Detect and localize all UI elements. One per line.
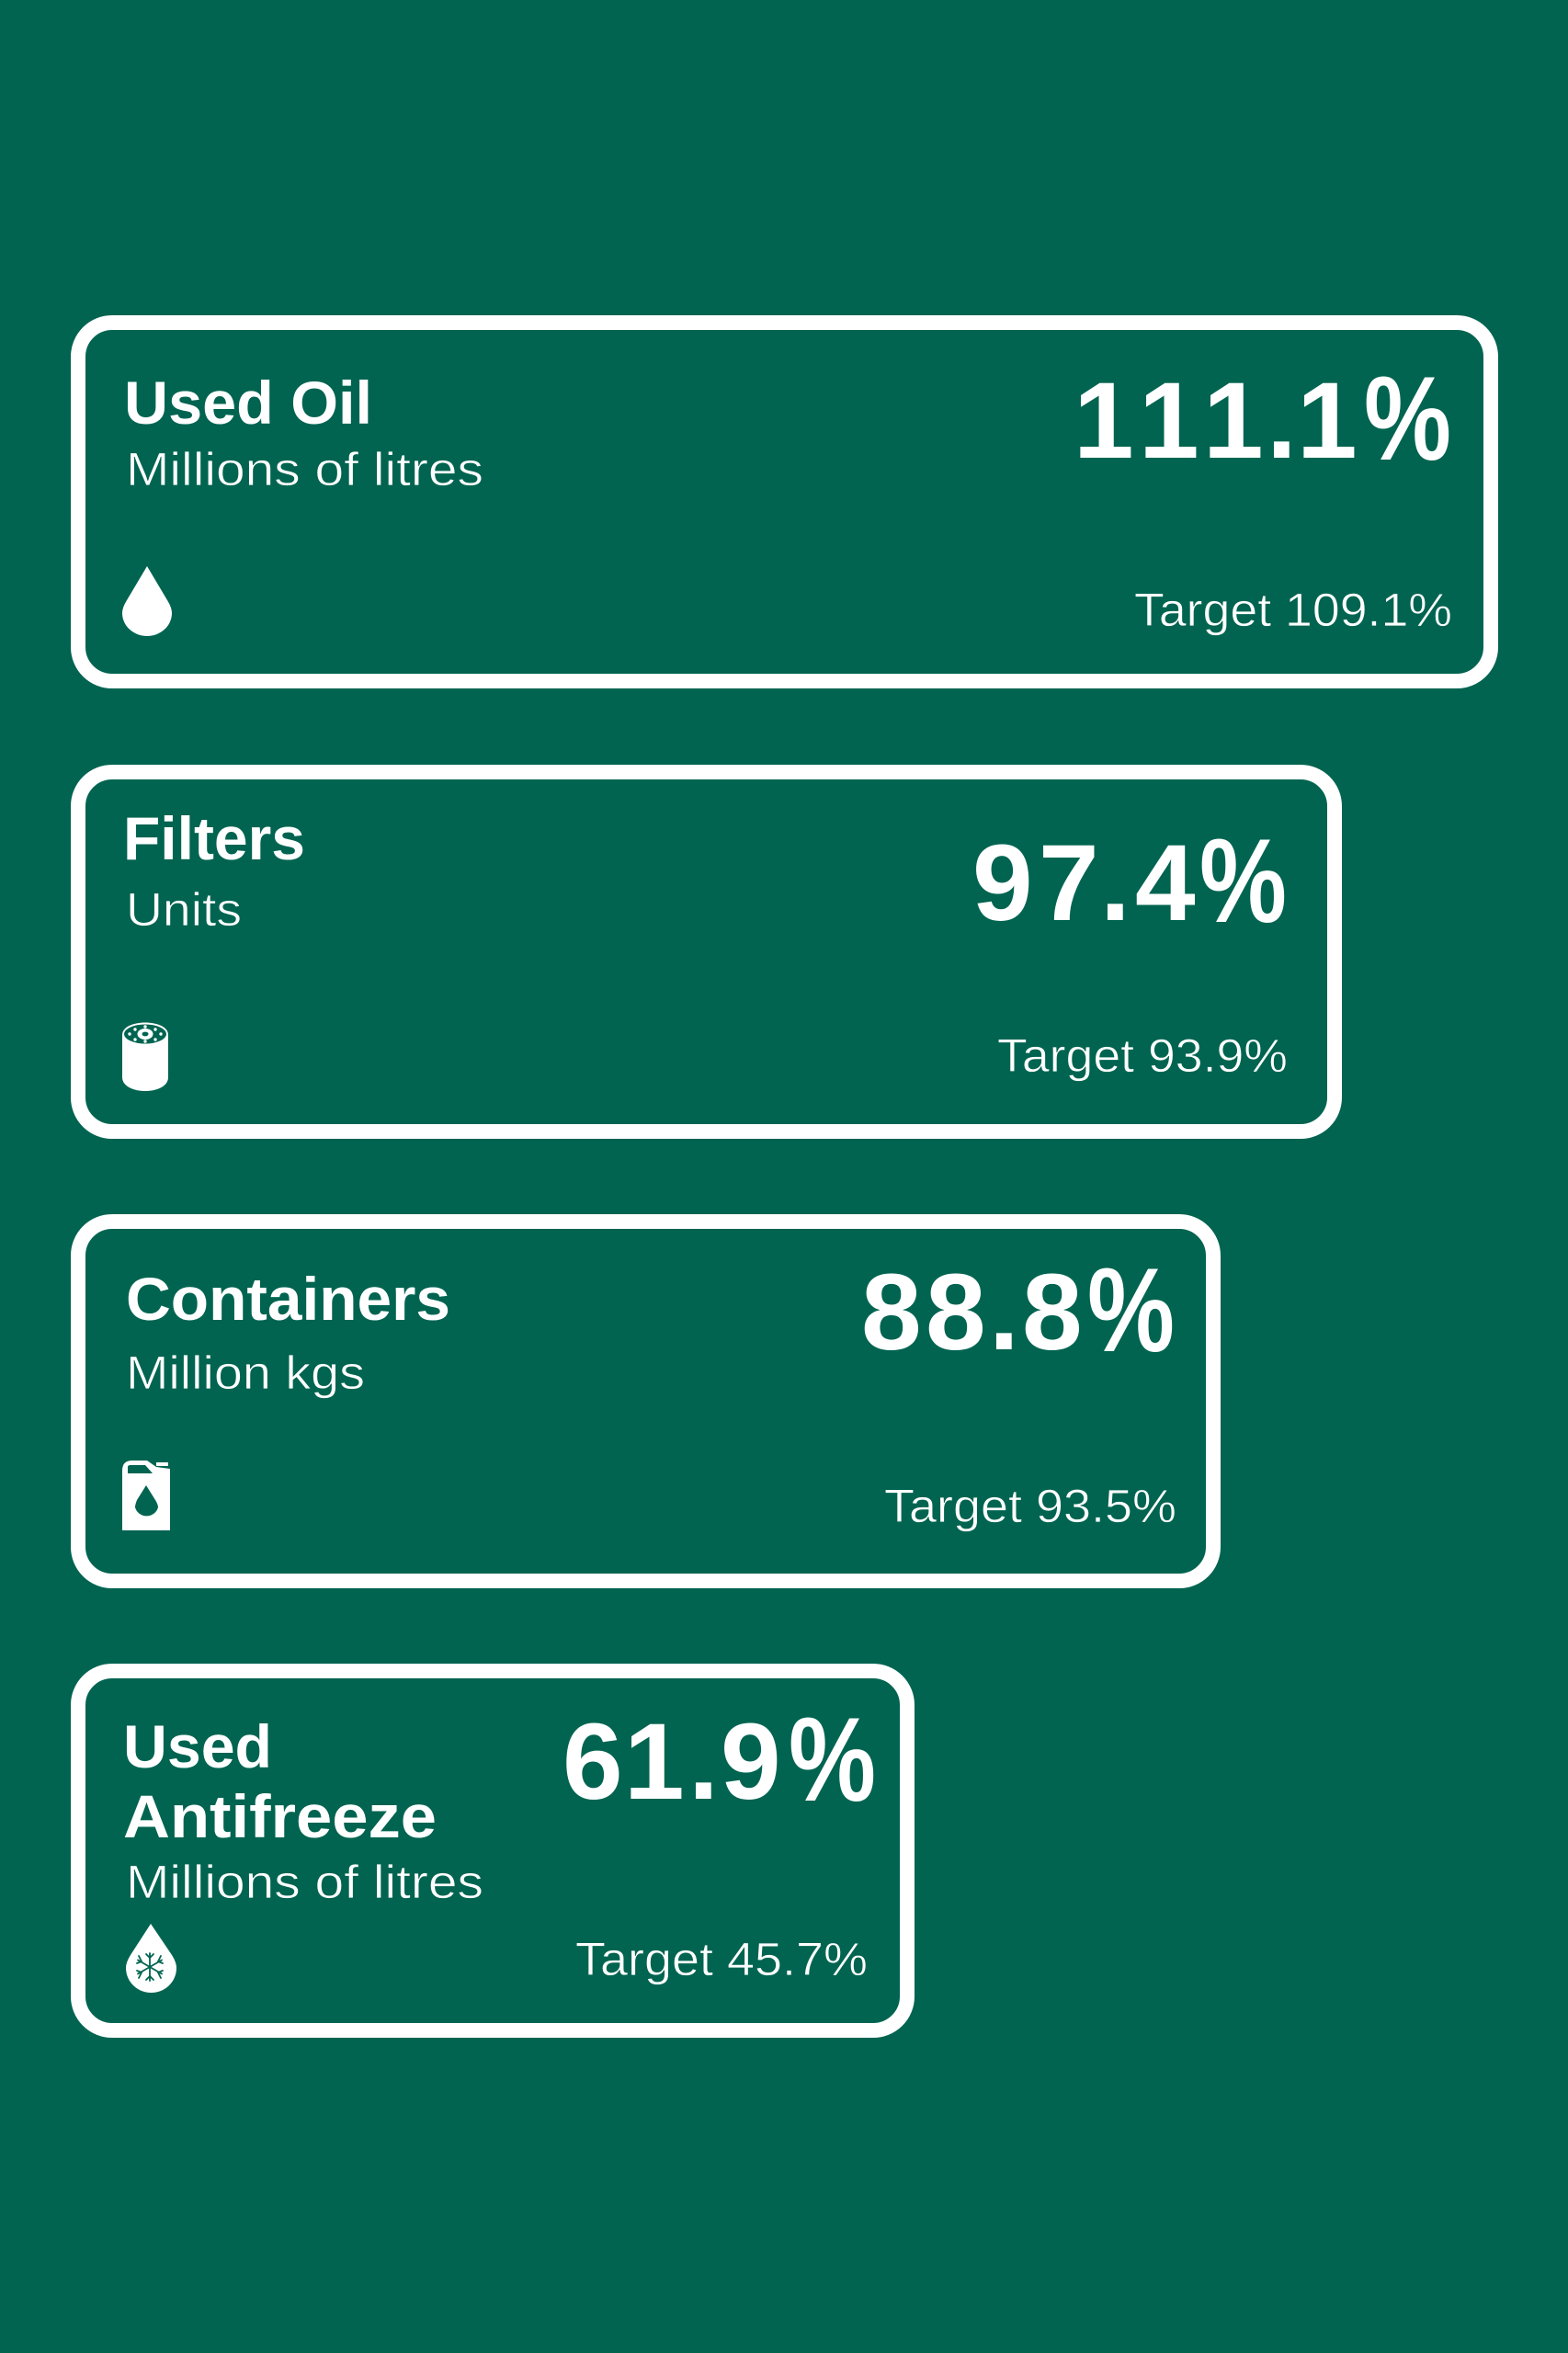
icon: antifreeze drop xyxy=(126,1924,176,1993)
value: 97.4%: % xyxy=(1199,813,1287,948)
value: 88.8%: % xyxy=(1087,1243,1175,1377)
heading: Containers: Containers xyxy=(126,1265,450,1333)
target: 109.1%: Target 109.1% xyxy=(1134,584,1452,636)
unit: Units: Units xyxy=(126,883,242,936)
value: 111.1%: % xyxy=(1364,351,1451,485)
value: 111.1%: 111.1 xyxy=(1074,360,1358,482)
unit: Millions of litres: Millions of litres xyxy=(126,443,483,495)
target: 45.7%: Target 45.7% xyxy=(575,1933,868,1985)
value: 97.4% xyxy=(972,813,1287,948)
heading: Used Antifreeze: Antifreeze xyxy=(123,1782,437,1850)
heading: Used Oil: Used Oil xyxy=(124,369,372,437)
panel: Used Oil xyxy=(78,323,1491,681)
panel: Filters xyxy=(78,772,1335,1131)
value: 111.1% xyxy=(1074,351,1451,485)
target: 93.5%: Target 93.5% xyxy=(884,1480,1176,1532)
panel: Containers xyxy=(78,1222,1213,1581)
unit: Millions of litres: Millions of litres xyxy=(126,1856,483,1908)
value: 61.9%: 61.9 xyxy=(562,1701,781,1823)
heading: Used Antifreeze xyxy=(123,1712,437,1850)
value: 97.4%: 97.4 xyxy=(972,823,1196,944)
value: 88.8% xyxy=(861,1243,1175,1377)
heading: Filters: Filters xyxy=(123,804,305,872)
icon: oil filter xyxy=(122,1022,168,1091)
unit: Million kgs: Million kgs xyxy=(126,1347,365,1399)
value: 61.9%: % xyxy=(789,1692,876,1826)
icon: oil container xyxy=(122,1461,170,1530)
panel: Used Antifreeze xyxy=(78,1671,907,2030)
icon: oil drop xyxy=(122,566,172,636)
target: 93.9%: Target 93.9% xyxy=(997,1029,1288,1082)
heading: Used Antifreeze: Used xyxy=(123,1712,272,1780)
value: 88.8%: 88.8 xyxy=(861,1252,1083,1373)
value: 61.9% xyxy=(562,1692,876,1826)
